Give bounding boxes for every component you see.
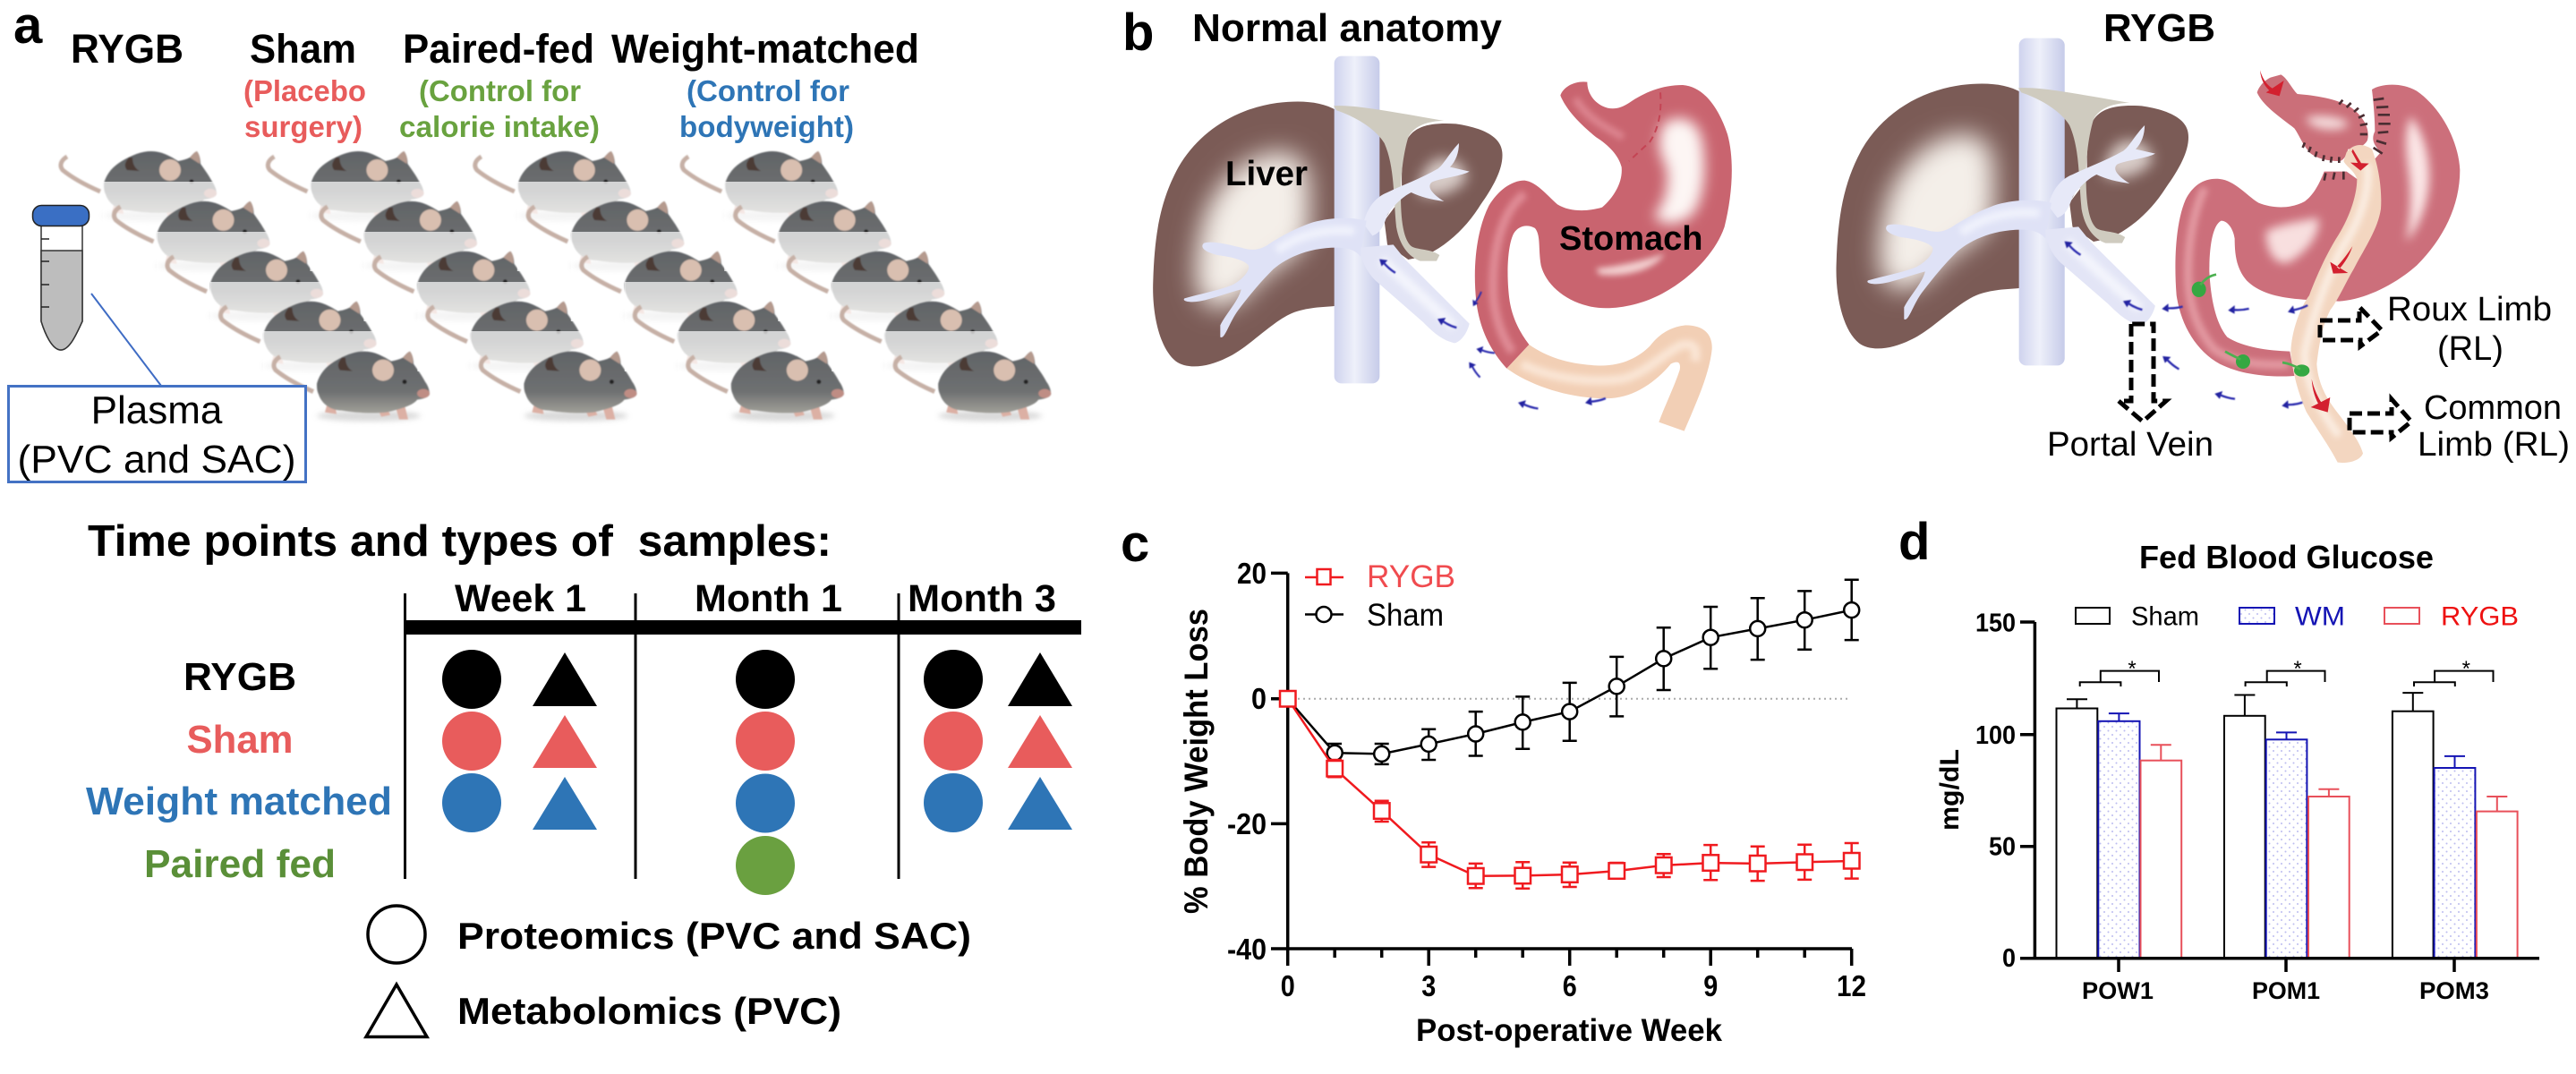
row label: Weight matched: Weight matched (86, 780, 392, 823)
panel d: fed blood glucose bar chart (1898, 513, 2539, 1004)
legend: RYGB: RYGB (2441, 601, 2519, 632)
legend: RYGB (2384, 601, 2519, 632)
y tick labels: 20 (1237, 557, 1267, 590)
mice column: RYGB (61, 151, 433, 422)
legend: Sham (2076, 601, 2199, 632)
subtitle: placebo surgery: surgery) (244, 111, 363, 144)
significance bracket: POM3 (2414, 657, 2494, 686)
y tick labels: -20 (1227, 807, 1267, 840)
column header: Week 1: Week 1 (455, 577, 586, 620)
label: Common Limb: Limb (RL) (2418, 426, 2570, 464)
row label: Paired fed: Paired fed (144, 842, 336, 886)
significance bracket: POW1: * (2128, 657, 2137, 681)
subtitle: control for calorie intake: (Control for (419, 75, 581, 108)
y tick labels: 100 (1975, 721, 2016, 750)
heading: RYGB: RYGB (71, 26, 183, 72)
legend icon: triangle (366, 984, 427, 1036)
illustration: RYGB liver and vessels (1837, 38, 2188, 365)
y tick labels: 150 (1975, 609, 2016, 638)
significance bracket: POW1 (2080, 657, 2159, 686)
label b: b (1122, 4, 1154, 62)
y axis title: mg/dL (1935, 749, 1965, 831)
y tick labels: 50 (1989, 833, 2016, 862)
legend: Sham (1305, 598, 1444, 633)
markers: RYGB row (442, 650, 1072, 709)
heading: Normal anatomy: Normal anatomy (1192, 6, 1503, 50)
illustration: RYGB stomach and limbs (2160, 70, 2460, 463)
arrow: common limb (2350, 399, 2411, 438)
arrow: portal vein (2119, 324, 2166, 422)
subtitle: control for bodyweight: bodyweight) (679, 111, 854, 144)
zero reference line (1298, 698, 1848, 700)
label: Roux Limb: (RL) (2437, 330, 2503, 368)
significance bracket: POM1 (2246, 657, 2325, 686)
significance bracket: POM3: * (2462, 657, 2470, 681)
table header bar (405, 620, 1081, 635)
row label: Sham: Sham (186, 718, 294, 762)
x tick labels: 12 (1837, 969, 1866, 1002)
x tick labels (2082, 977, 2489, 1004)
significance bracket: POM1: * (2293, 657, 2302, 681)
markers: Sham row (442, 712, 1072, 771)
legend icon: circle (368, 906, 425, 963)
legend: Sham: Sham (2131, 601, 2199, 632)
arrow: Roux limb (2320, 307, 2382, 346)
callout: plasma: Plasma (91, 388, 223, 432)
subtitle: placebo surgery: (Placebo (243, 75, 366, 108)
mice column: Sham (268, 151, 640, 422)
label: Portal Vein: Portal Vein (2047, 426, 2213, 464)
marker: Paired fed (736, 836, 795, 895)
heading: Sham: Sham (250, 26, 356, 72)
illustration: normal liver and vessels (1153, 56, 1503, 383)
label: Stomach: Stomach (1559, 220, 1702, 258)
series: RYGB (1280, 691, 1860, 889)
x tick labels: POM3 (2419, 977, 2489, 1004)
y tick labels: 0 (1251, 682, 1267, 715)
x tick labels: 3 (1421, 969, 1436, 1002)
x tick labels: POM1 (2252, 977, 2320, 1004)
mice column: Paired-fed (475, 151, 848, 422)
markers: Weight matched row (442, 773, 1072, 832)
x tick labels (1281, 969, 1866, 1002)
panel a: study groups (9, 0, 1054, 482)
x tick labels: 0 (1281, 969, 1295, 1002)
subtitle: control for calorie intake: calorie intake) (399, 111, 600, 144)
icon: plasma tube (32, 206, 90, 350)
row label: RYGB: RYGB (183, 655, 296, 699)
panel a: time points table (86, 516, 1081, 1036)
bars: WM (2098, 713, 2475, 959)
illustration: normal stomach and intestine (1466, 81, 1732, 431)
y axis title: % Body Weight Loss (1178, 609, 1215, 914)
legend text: proteomics: Proteomics (PVC and SAC) (457, 915, 971, 957)
x axis title: Post-operative Week (1416, 1013, 1723, 1048)
connector line: tube to plasma box (91, 294, 161, 386)
callout: plasma: (PVC and SAC) (18, 438, 295, 482)
label d: d (1898, 513, 1930, 571)
y tick labels (1227, 557, 1267, 966)
heading: Weight-matched: Weight-matched (611, 26, 919, 72)
subtitle: control for bodyweight: (Control for (687, 75, 849, 108)
label: Liver: Liver (1225, 155, 1308, 193)
axes and ticks (1271, 573, 1852, 966)
label: Roux Limb: Roux Limb (2387, 291, 2552, 328)
legend text: metabolomics: Metabolomics (PVC) (457, 990, 841, 1032)
callout: plasma (9, 387, 306, 482)
panel b: anatomy (1122, 4, 2570, 464)
y tick labels: 0 (2002, 944, 2016, 973)
bars: Sham (2057, 693, 2434, 959)
series: Sham (1288, 580, 1859, 764)
table heading: Time points and types of samples: (88, 516, 832, 566)
y tick labels: -40 (1227, 933, 1267, 966)
legend: WM (2239, 601, 2345, 632)
y tick labels (1975, 609, 2016, 973)
column header: Month 1: Month 1 (695, 577, 842, 620)
x tick labels: 6 (1563, 969, 1577, 1002)
label c: c (1121, 515, 1149, 573)
x tick labels: 9 (1703, 969, 1718, 1002)
heading: Paired-fed: Paired-fed (403, 26, 594, 72)
heading: RYGB anatomy: RYGB (2103, 6, 2215, 50)
axes and ticks (2020, 622, 2539, 972)
panel c: weight loss line chart (1121, 515, 1866, 1048)
column header: Month 3: Month 3 (908, 577, 1056, 620)
chart title: Fed Blood Glucose (2139, 539, 2434, 575)
legend: RYGB (1305, 559, 1455, 594)
legend: Sham: Sham (1367, 598, 1444, 633)
mice column: Weight-matched (682, 151, 1054, 422)
label: Common Limb: Common (2424, 389, 2562, 427)
x tick labels: POW1 (2082, 977, 2154, 1004)
legend: WM: WM (2295, 601, 2345, 632)
bars: RYGB (2141, 745, 2518, 959)
legend: RYGB: RYGB (1367, 559, 1455, 594)
